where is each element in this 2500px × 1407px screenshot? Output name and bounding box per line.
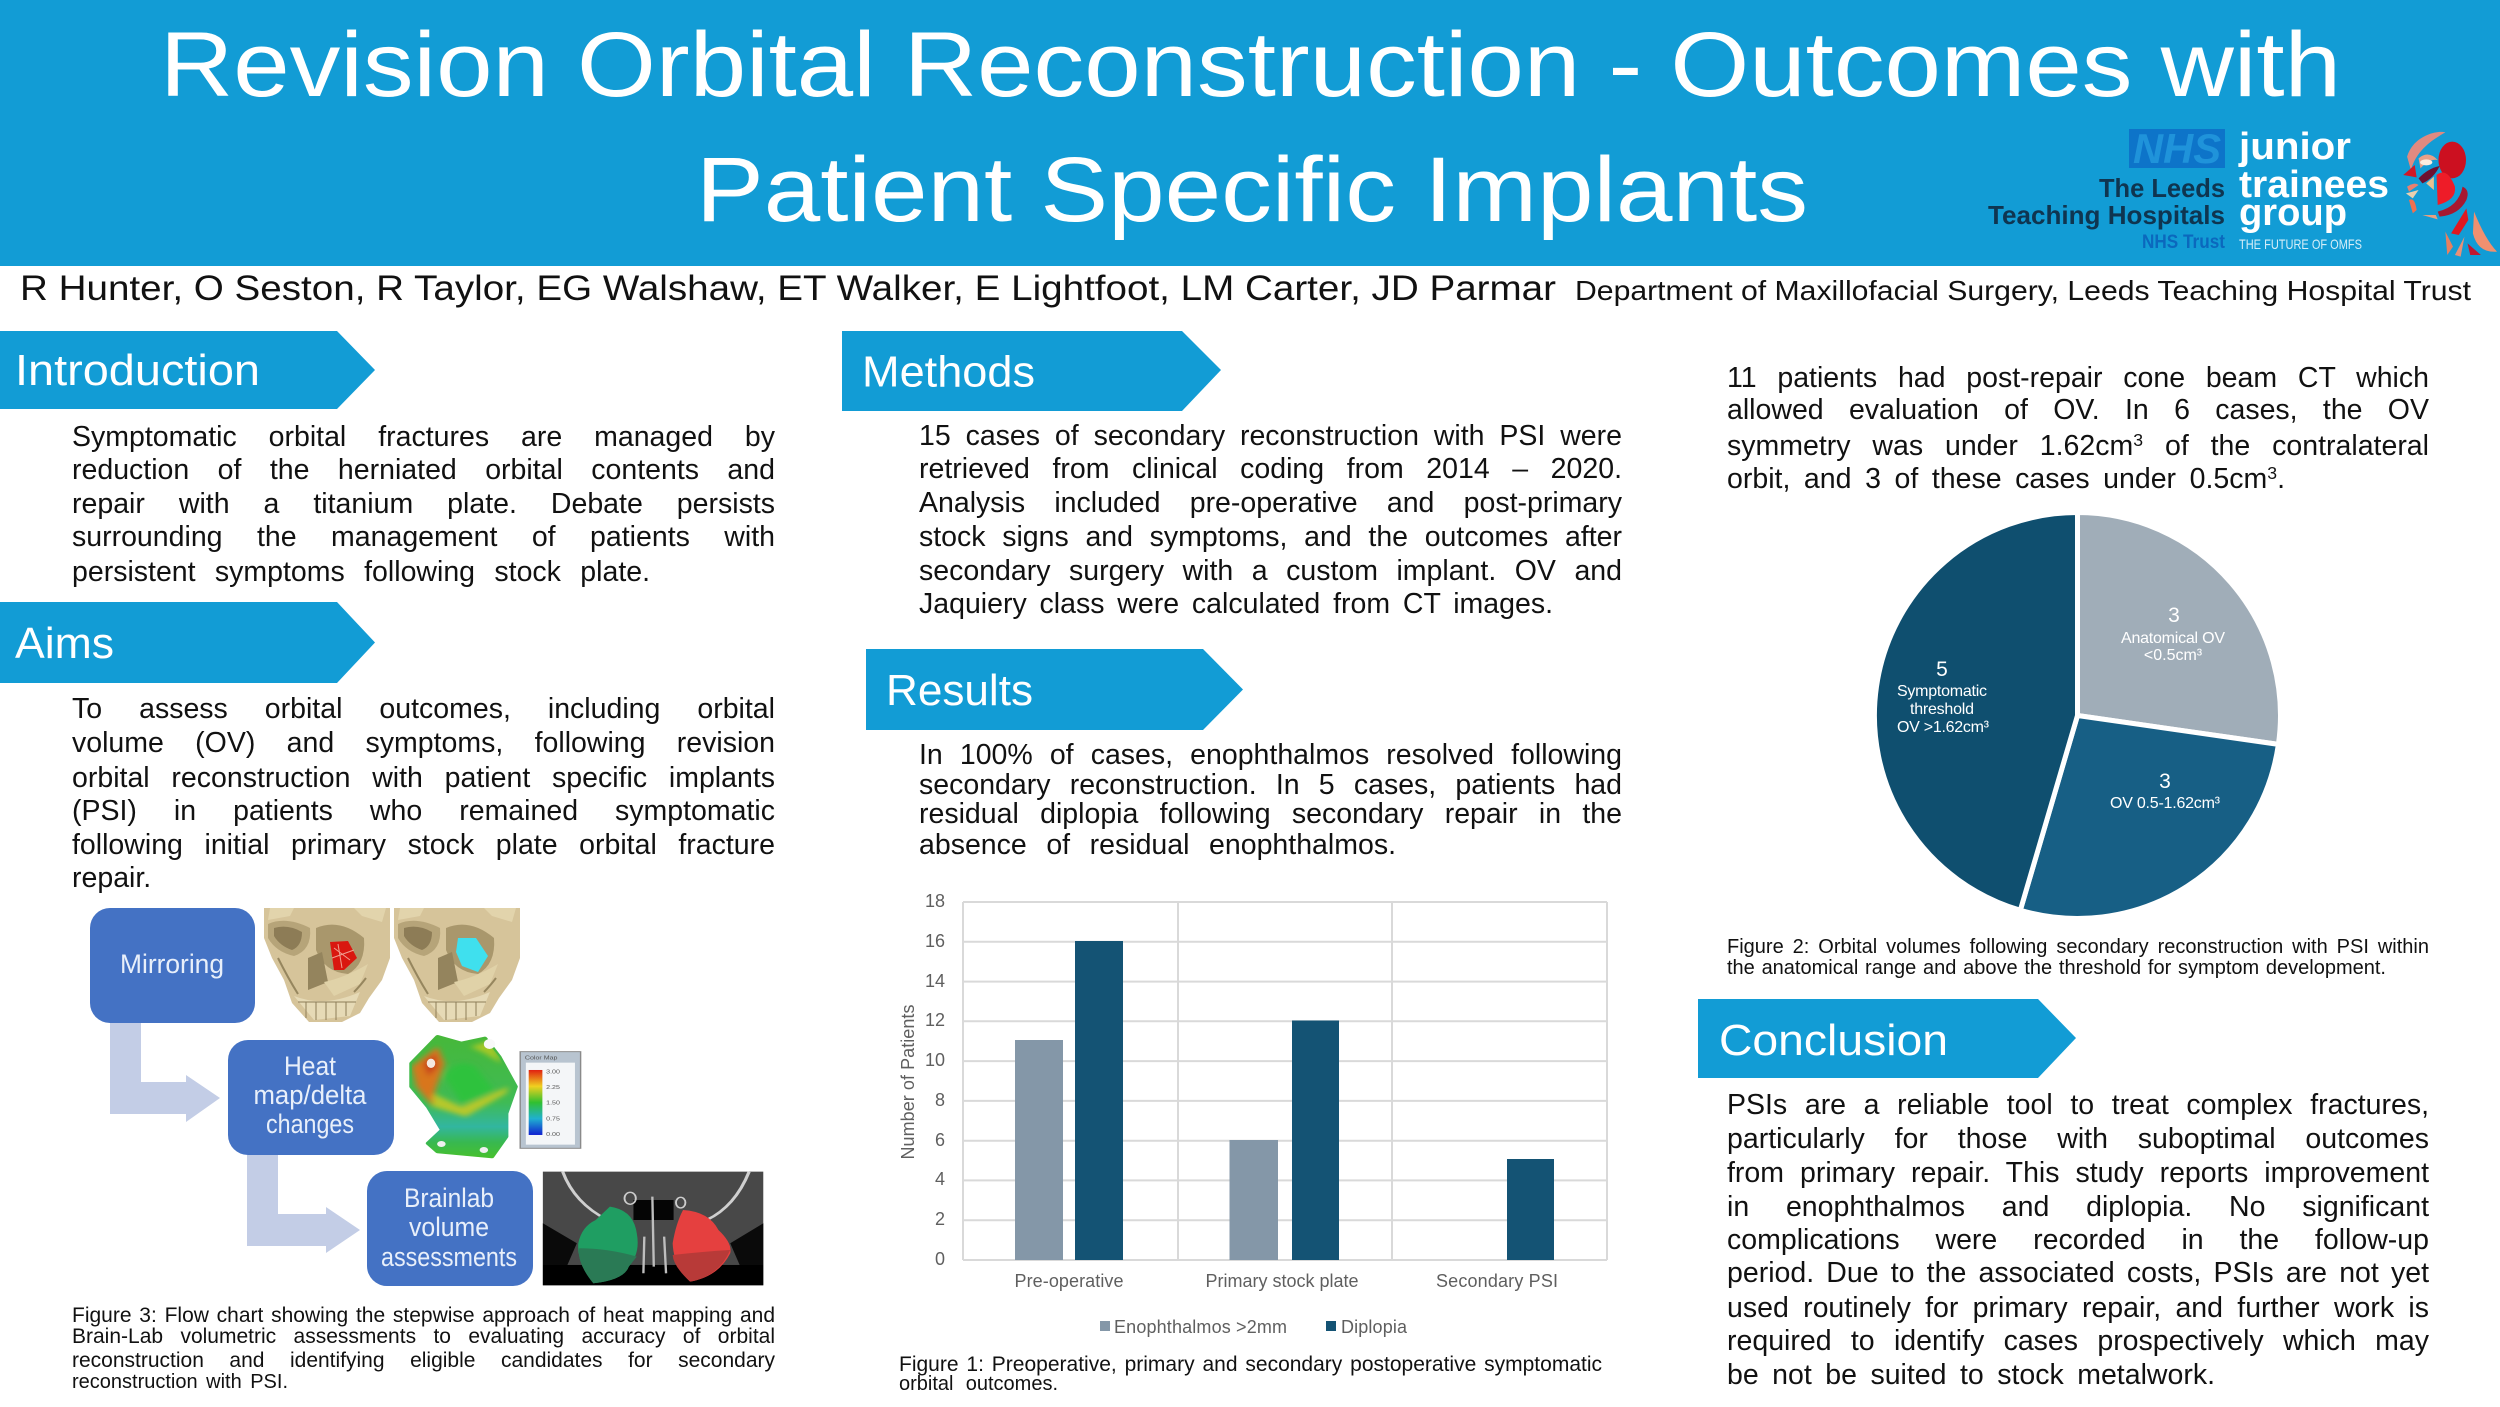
box: Heat map/delta changes: Heat bbox=[284, 1051, 336, 1081]
image: colour map window: 1.50 bbox=[546, 1101, 561, 1106]
category labels bbox=[1014, 1271, 1558, 1291]
pie chart: orbital volumes bbox=[1876, 515, 2278, 916]
text: conclusion body: particularly for those with suboptimal outcomes bbox=[1727, 1123, 2429, 1155]
text: CT evaluation: orbit, and 3 of these cases under 0.5cm3. bbox=[1727, 463, 2285, 495]
icon: parrot logo bbox=[2403, 132, 2497, 257]
text: results body bbox=[919, 739, 1622, 861]
logo: junior trainees group: THE FUTURE OF OMFS bbox=[2239, 236, 2362, 252]
image: heat map of implant bbox=[412, 1037, 515, 1157]
category labels: Secondary PSI bbox=[1436, 1271, 1558, 1291]
text: results body: absence of residual enophthalmos. bbox=[919, 829, 1396, 861]
text: methods body: Analysis included pre-operative and post-primary bbox=[919, 487, 1622, 519]
label: OV range bbox=[2110, 770, 2221, 812]
box: Brainlab volume assessments: assessments bbox=[381, 1242, 517, 1272]
text: aims body: (PSI) in patients who remained symptomatic bbox=[72, 795, 775, 827]
logo: NHS Leeds Teaching Hospitals: Teaching Hospitals bbox=[1988, 200, 2225, 230]
heading: Conclusion bbox=[1698, 999, 2076, 1078]
label: anatomical OV: Anatomical OV bbox=[2121, 630, 2225, 647]
heading: Methods: Methods bbox=[862, 348, 1035, 396]
logo: NHS Leeds Teaching Hospitals: NHS Trust bbox=[2142, 232, 2226, 253]
text: conclusion body: required to identify cases prospectively which may bbox=[1727, 1325, 2429, 1357]
text: results body: residual diplopia following secondary repair in the bbox=[919, 798, 1622, 830]
y axis labels bbox=[925, 891, 945, 1269]
logo: NHS Leeds Teaching Hospitals: The Leeds bbox=[2099, 173, 2225, 203]
image: colour map window: 0.00 bbox=[546, 1132, 561, 1138]
y axis labels: 8 bbox=[935, 1090, 945, 1110]
text: aims body bbox=[72, 693, 775, 894]
text: introduction body: surrounding the management of patients with bbox=[72, 521, 775, 553]
text: introduction body: persistent symptoms following stock plate. bbox=[72, 556, 650, 588]
y axis labels: 18 bbox=[925, 891, 945, 911]
heading: Methods bbox=[842, 331, 1221, 411]
text: conclusion body: PSIs are a reliable tool to treat complex fractures, bbox=[1727, 1089, 2429, 1121]
authors and department bbox=[20, 269, 2471, 308]
text: methods body: retrieved from clinical coding from 2014 – 2020. bbox=[919, 453, 1622, 485]
text: methods body: Jaquiery class were calculated from CT images. bbox=[919, 588, 1553, 620]
heading: Conclusion: Conclusion bbox=[1719, 1016, 1948, 1065]
caption: figure 3: Brain-Lab volumetric assessments to evaluating accuracy of orbital bbox=[72, 1325, 775, 1348]
y axis labels: 12 bbox=[925, 1010, 945, 1030]
box: Brainlab volume assessments: Brainlab bbox=[404, 1183, 494, 1213]
authors and department: R Hunter, O Seston, R Taylor, EG Walshaw, ET Walker, E Lightfoot, LM Carter, JD Parmar bbox=[20, 269, 1556, 308]
heading: Introduction: Introduction bbox=[15, 346, 260, 395]
heading: Results bbox=[866, 649, 1243, 730]
image: colour map window: Color Map bbox=[525, 1055, 558, 1061]
label: OV range: 3 bbox=[2159, 770, 2171, 793]
box: Heat map/delta changes: changes bbox=[266, 1109, 354, 1139]
image: colour map window: 2.25 bbox=[546, 1085, 561, 1091]
caption: figure 2: the anatomical range and above the threshold for symptom development. bbox=[1727, 957, 2386, 979]
y axis title: Number of Patients bbox=[898, 1004, 918, 1160]
arrow: mirroring to heat map bbox=[110, 1023, 220, 1122]
text: conclusion body: be not be suited to stock metalwork. bbox=[1727, 1359, 2215, 1391]
category labels: Primary stock plate bbox=[1206, 1271, 1358, 1291]
text: conclusion body: used routinely for primary repair, and further work is bbox=[1727, 1292, 2429, 1324]
image: skull with cyan overlay bbox=[394, 908, 520, 1022]
text: introduction body: repair with a titanium plate. Debate persists bbox=[72, 488, 775, 520]
slice: anatomical OV bbox=[2078, 512, 2280, 744]
box: Heat map/delta changes bbox=[228, 1040, 394, 1155]
caption: figure 2: Figure 2: Orbital volumes following secondary reconstruction with PSI within bbox=[1727, 936, 2429, 958]
bars: diplopia bbox=[1075, 941, 1554, 1260]
text: introduction body: Symptomatic orbital fractures are managed by bbox=[72, 421, 775, 453]
text: CT evaluation: allowed evaluation of OV. In 6 cases, the OV bbox=[1727, 394, 2429, 426]
text: aims body: following initial primary stock plate orbital fracture bbox=[72, 829, 775, 861]
heading: Aims bbox=[0, 602, 375, 683]
text: aims body: orbital reconstruction with patient specific implants bbox=[72, 762, 775, 794]
logo: NHS Leeds Teaching Hospitals bbox=[1988, 125, 2226, 253]
label: symptomatic threshold: 5 bbox=[1936, 658, 1948, 681]
caption: figure 2 bbox=[1727, 936, 2429, 979]
text: results body: In 100% of cases, enophthalmos resolved following bbox=[919, 739, 1622, 771]
image: colour map window: 0.75 bbox=[546, 1116, 561, 1122]
title: Patient Specific Implants bbox=[696, 139, 1808, 241]
box: Mirroring bbox=[90, 908, 255, 1023]
legend: Diplopia bbox=[1341, 1317, 1408, 1337]
text: conclusion body: in enophthalmos and diplopia. No significant bbox=[1727, 1191, 2429, 1223]
title: Revision Orbital Reconstruction - Outcomes with bbox=[160, 14, 2341, 116]
header banner bbox=[0, 0, 2500, 266]
label: symptomatic threshold: threshold bbox=[1910, 701, 1974, 718]
text: results body: secondary reconstruction. In 5 cases, patients had bbox=[919, 769, 1622, 801]
text: aims body: volume (OV) and symptoms, following revision bbox=[72, 727, 775, 759]
text: aims body: repair. bbox=[72, 862, 151, 894]
text: introduction body: reduction of the herniated orbital contents and bbox=[72, 454, 775, 486]
image: skull with red mesh bbox=[264, 908, 390, 1022]
slice: OV 0.5-1.62 bbox=[2020, 716, 2278, 919]
arrow: heat map to brainlab bbox=[247, 1155, 360, 1253]
authors and department: Department of Maxillofacial Surgery, Leeds Teaching Hospital Trust bbox=[1575, 275, 2471, 306]
y axis labels: 2 bbox=[935, 1209, 945, 1229]
title bbox=[160, 14, 2341, 241]
label: anatomical OV: <0.5cm³ bbox=[2144, 647, 2203, 664]
logo: junior trainees group: junior bbox=[2238, 126, 2351, 168]
text: conclusion body: complications were recorded in the follow-up bbox=[1727, 1224, 2429, 1256]
y axis labels: 4 bbox=[935, 1169, 945, 1189]
text: introduction body bbox=[72, 421, 775, 588]
slice: symptomatic threshold bbox=[1874, 512, 2078, 910]
image: colour map window bbox=[520, 1052, 581, 1148]
y axis labels: 0 bbox=[935, 1249, 945, 1269]
text: methods body: 15 cases of secondary reconstruction with PSI were bbox=[919, 420, 1622, 452]
text: conclusion body bbox=[1727, 1089, 2429, 1391]
text: methods body: secondary surgery with a custom implant. OV and bbox=[919, 555, 1622, 587]
heading: Aims: Aims bbox=[15, 619, 114, 668]
category labels: Pre-operative bbox=[1014, 1271, 1124, 1291]
label: anatomical OV: 3 bbox=[2168, 604, 2180, 627]
text: aims body: To assess orbital outcomes, including orbital bbox=[72, 693, 775, 725]
bar chart: symptomatic outcomes bbox=[898, 891, 1608, 1337]
heading: Results: Results bbox=[886, 666, 1033, 715]
label: symptomatic threshold bbox=[1897, 658, 1990, 736]
box: Brainlab volume assessments bbox=[367, 1171, 533, 1286]
text: conclusion body: from primary repair. This study reports improvement bbox=[1727, 1157, 2429, 1189]
box: Brainlab volume assessments: volume bbox=[409, 1212, 489, 1242]
logo: NHS Leeds Teaching Hospitals: NHS bbox=[2133, 125, 2221, 172]
flow chart: stepwise approach bbox=[90, 908, 764, 1286]
caption: figure 1: orbital outcomes. bbox=[899, 1373, 1058, 1395]
box: Mirroring: Mirroring bbox=[120, 949, 224, 979]
text: methods body bbox=[919, 420, 1622, 620]
logo: junior trainees group: group bbox=[2239, 192, 2347, 234]
caption: figure 1 bbox=[899, 1353, 1602, 1395]
text: CT evaluation bbox=[1727, 362, 2429, 495]
box: Heat map/delta changes: map/delta bbox=[254, 1080, 367, 1110]
logo: junior trainees group bbox=[2238, 126, 2389, 252]
y axis labels: 14 bbox=[925, 971, 945, 991]
caption: figure 1: Figure 1: Preoperative, primary and secondary postoperative symptomatic bbox=[899, 1353, 1602, 1376]
logo: junior trainees group: trainees bbox=[2239, 164, 2389, 206]
caption: figure 3: reconstruction and identifying eligible candidates for secondary bbox=[72, 1349, 775, 1372]
caption: figure 3: Figure 3: Flow chart showing the stepwise approach of heat mapping and bbox=[72, 1304, 775, 1327]
label: symptomatic threshold: OV >1.62cm³ bbox=[1897, 719, 1990, 736]
heading: Introduction bbox=[0, 331, 375, 409]
caption: figure 3: reconstruction with PSI. bbox=[72, 1371, 288, 1393]
image: CT with orbital volumes bbox=[543, 1172, 763, 1285]
caption: figure 3 bbox=[72, 1304, 775, 1393]
text: methods body: stock signs and symptoms, and the outcomes after bbox=[919, 521, 1622, 553]
y axis labels: 16 bbox=[925, 931, 945, 951]
bars: enophthalmos bbox=[1015, 1040, 1278, 1260]
y axis labels: 10 bbox=[925, 1050, 945, 1070]
label: OV range: OV 0.5-1.62cm³ bbox=[2110, 795, 2221, 812]
label: anatomical OV bbox=[2121, 604, 2225, 664]
text: CT evaluation: 11 patients had post-repair cone beam CT which bbox=[1727, 362, 2429, 394]
legend bbox=[1100, 1317, 1408, 1337]
text: conclusion body: period. Due to the associated costs, PSIs are not yet bbox=[1727, 1257, 2429, 1289]
text: CT evaluation: symmetry was under 1.62cm3 of the contralateral bbox=[1727, 430, 2429, 462]
label: symptomatic threshold: Symptomatic bbox=[1897, 683, 1987, 700]
image: colour map window: 3.00 bbox=[546, 1069, 561, 1075]
y axis labels: 6 bbox=[935, 1130, 945, 1150]
legend: Enophthalmos >2mm bbox=[1114, 1317, 1287, 1337]
